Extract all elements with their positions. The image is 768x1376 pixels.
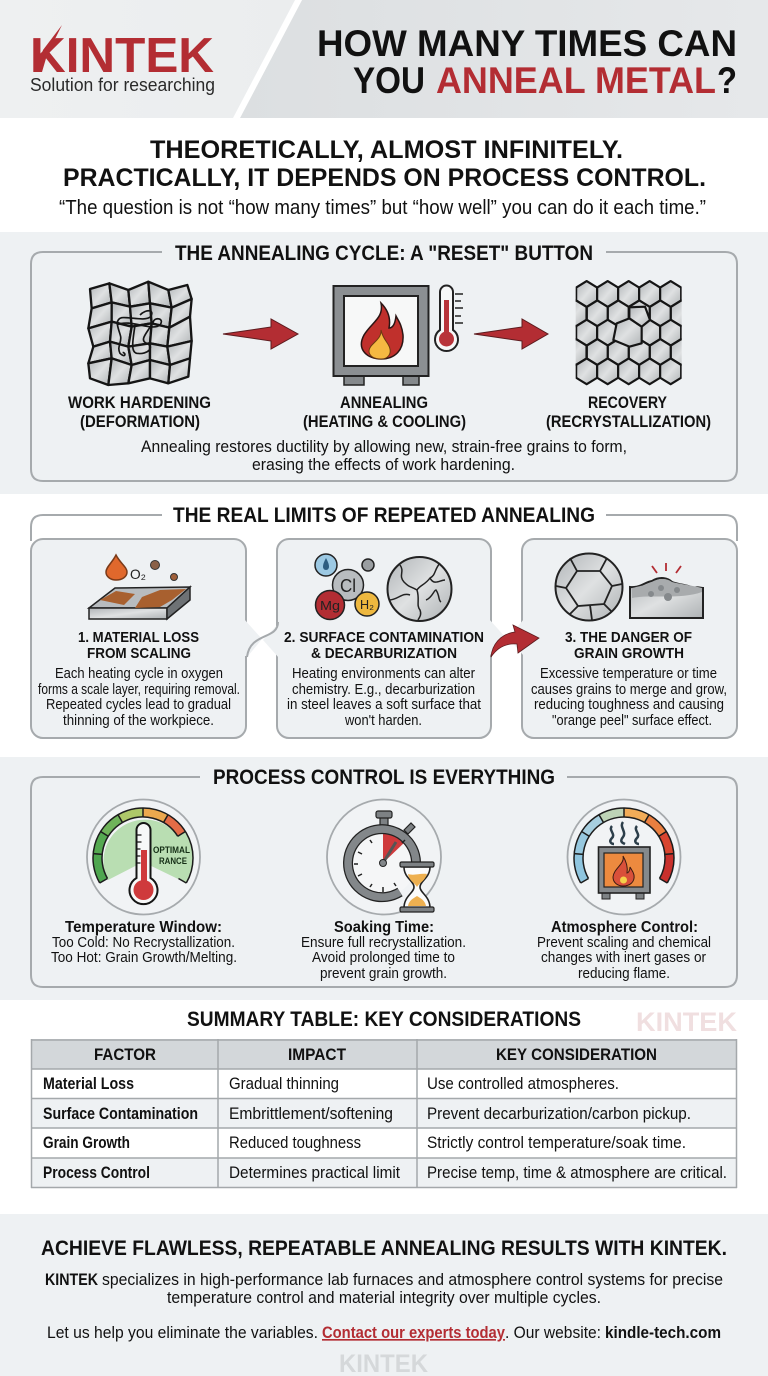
subtitle answer: PRACTICALLY, IT DEPENDS ON PROCESS CONTROL.	[63, 164, 706, 192]
card 2 heading: 2. SURFACE CONTAMINATION	[284, 629, 484, 646]
card 2 body: won't harden.	[344, 713, 422, 729]
card 1: material loss	[38, 555, 240, 729]
heading: summary table: SUMMARY TABLE: KEY CONSIDERATIONS	[187, 1008, 581, 1031]
icon: temperature gauge: OPTIMAL	[153, 845, 190, 856]
icon: stopwatch and hourglass	[327, 800, 441, 914]
panel: annealing cycle	[0, 232, 768, 494]
icon: scaling slab	[89, 555, 190, 619]
card 1 heading: FROM SCALING	[87, 645, 191, 662]
text: annealing explanation	[141, 438, 627, 474]
panel: process control	[0, 757, 768, 1000]
card 3 heading: GRAIN GROWTH	[574, 645, 684, 662]
text: temperature window: Too Cold: No Recrystallization.	[52, 935, 235, 951]
card 2 body	[287, 666, 481, 729]
subtitle answer	[63, 136, 706, 192]
footer contact line: Let us help you eliminate the variables.	[47, 1324, 318, 1342]
footer description: specializes in high-performance lab furnaces and atmosphere control systems for precise	[102, 1271, 723, 1289]
label: annealing: ANNEALING	[340, 394, 428, 412]
text: soaking time: prevent grain growth.	[320, 966, 447, 982]
label: work hardening	[68, 394, 211, 431]
card 2 body: in steel leaves a soft surface that	[287, 697, 481, 713]
text: soaking time: Soaking Time:	[334, 919, 434, 936]
arrow: to recovery	[474, 319, 548, 349]
row: surface contamination: Prevent decarburization/carbon pickup.	[427, 1105, 691, 1123]
title	[317, 23, 737, 101]
footer heading: ACHIEVE FLAWLESS, REPEATABLE ANNEALING RESULTS WITH KINTEK.	[41, 1237, 727, 1260]
row: grain growth	[43, 1134, 686, 1152]
label: work hardening: WORK HARDENING	[68, 394, 211, 412]
heading: real limits: THE REAL LIMITS OF REPEATED ANNEALING	[173, 504, 595, 527]
heading: process control: PROCESS CONTROL IS EVERYTHING	[213, 766, 555, 789]
card 3: grain growth	[531, 554, 727, 729]
row: process control	[43, 1164, 727, 1182]
card 1 heading: 1. MATERIAL LOSS	[78, 629, 199, 646]
icon: temperature gauge	[75, 790, 211, 926]
panel: call to action footer	[0, 1214, 768, 1376]
card 1 body: thinning of the workpiece.	[63, 713, 214, 729]
title: ?	[717, 60, 737, 101]
row: material loss: Use controlled atmospheres.	[427, 1075, 619, 1093]
card 1 body: Repeated cycles lead to gradual	[46, 697, 231, 713]
card 2 heading: & DECARBURIZATION	[311, 645, 457, 662]
footer contact line: Contact our experts today	[322, 1324, 506, 1342]
footer contact line	[47, 1324, 721, 1342]
text: soaking time	[301, 919, 466, 982]
text: atmosphere control: reducing flame.	[578, 966, 670, 982]
cards and connectors	[31, 539, 737, 738]
row: process control: Precise temp, time & atmosphere are critical.	[427, 1164, 727, 1182]
row: grain growth: Strictly control temperature/soak time.	[427, 1134, 686, 1152]
text: temperature window: Too Hot: Grain Growth/Melting.	[51, 950, 237, 966]
icon: enlarged grains and orange peel surface	[556, 554, 703, 620]
summary table	[31, 1039, 737, 1188]
card 3 body	[531, 666, 727, 729]
title: HOW MANY TIMES CAN	[317, 23, 737, 64]
arrow: curved red	[491, 625, 539, 657]
row: surface contamination	[43, 1105, 691, 1123]
label: annealing: (HEATING & COOLING)	[303, 413, 466, 431]
card 3 body: "orange peel" surface effect.	[552, 713, 712, 729]
card 3 heading: 3. THE DANGER OF	[565, 629, 692, 646]
table header: IMPACT	[288, 1046, 346, 1064]
header band	[0, 0, 768, 118]
label: recovery	[546, 394, 711, 431]
card 1 heading	[78, 629, 199, 662]
row: material loss: Material Loss	[43, 1075, 134, 1093]
text: temperature window	[51, 919, 237, 966]
row: process control: Determines practical limit	[229, 1164, 400, 1182]
icon: scaling slab: O₂	[130, 566, 146, 582]
card 3 body: reducing toughness and causing	[534, 697, 724, 713]
card 2 heading	[284, 629, 484, 662]
icon: thermometer	[435, 286, 463, 351]
text: atmosphere control: Atmosphere Control:	[551, 919, 698, 936]
icon: deformed grains	[88, 282, 192, 385]
row: material loss: Gradual thinning	[229, 1075, 339, 1093]
text: atmosphere control: Prevent scaling and chemical	[537, 935, 711, 951]
icon: atmosphere gauge with furnace	[556, 790, 692, 926]
icon: contaminant molecules and cracked surface: Mg	[320, 598, 340, 613]
label: recovery: (RECRYSTALLIZATION)	[546, 413, 711, 431]
table header: KEY CONSIDERATION	[496, 1046, 657, 1064]
text: annealing explanation: Annealing restores ductility by allowing new, strain-free grains to form,	[141, 438, 627, 456]
row: process control: Process Control	[43, 1164, 150, 1182]
row: grain growth: Grain Growth	[43, 1134, 130, 1152]
text: soaking time: Avoid prolonged time to	[312, 950, 455, 966]
title: YOU	[353, 60, 425, 101]
arrow: to annealing	[223, 319, 298, 349]
card 2: surface contamination	[284, 554, 484, 729]
card 3 body: causes grains to merge and grow,	[531, 682, 727, 698]
text: annealing explanation: erasing the effects of work hardening.	[252, 456, 515, 474]
logo: KINTEK	[30, 29, 214, 83]
label: annealing	[303, 394, 466, 431]
row: grain growth: Reduced toughness	[229, 1134, 361, 1152]
row: surface contamination: Surface Contamination	[43, 1105, 198, 1123]
watermark logo: KINTEK	[636, 1007, 738, 1037]
subtitle answer: THEORETICALLY, ALMOST INFINITELY.	[150, 136, 623, 164]
card 2 body: chemistry. E.g., decarburization	[292, 682, 475, 698]
icon: contaminant molecules and cracked surface: H₂	[360, 597, 374, 612]
text: temperature window: Temperature Window:	[65, 919, 222, 936]
text: atmosphere control: changes with inert gases or	[541, 950, 706, 966]
footer contact line: . Our website:	[505, 1324, 601, 1342]
card 2 body: Heating environments can alter	[292, 666, 475, 682]
table header: FACTOR	[94, 1046, 156, 1064]
card 3 heading	[565, 629, 692, 662]
title: ANNEAL METAL	[436, 60, 716, 101]
card 1 body: Each heating cycle in oxygen	[55, 666, 223, 682]
panel: real limits	[31, 504, 737, 738]
logo: Solution for researching	[30, 75, 215, 95]
icon: contaminant molecules and cracked surface	[315, 554, 452, 621]
icon: recrystallized grains	[576, 280, 682, 386]
icon: contaminant molecules and cracked surface: Cl	[340, 576, 356, 596]
card 1 body	[38, 666, 240, 729]
table header	[94, 1046, 657, 1064]
card 1 body: forms a scale layer, requiring removal.	[38, 682, 240, 698]
card 3 body: Excessive temperature or time	[540, 666, 717, 682]
icon: temperature gauge: RANCE	[159, 856, 187, 867]
row: surface contamination: Embrittlement/softening	[229, 1105, 393, 1123]
text: soaking time: Ensure full recrystallization.	[301, 935, 466, 951]
footer description: KINTEK	[45, 1271, 98, 1289]
heading: annealing cycle: THE ANNEALING CYCLE: A "RESET" BUTTON	[175, 242, 593, 265]
quote: “The question is not “how many times” but “how well” you can do it each time.”	[59, 197, 706, 219]
icon: furnace with flame	[334, 286, 428, 385]
text: atmosphere control	[537, 919, 711, 982]
label: recovery: RECOVERY	[588, 394, 667, 412]
label: work hardening: (DEFORMATION)	[80, 413, 200, 431]
footer contact line: kindle-tech.com	[605, 1324, 721, 1342]
footer description	[45, 1271, 723, 1307]
footer description: temperature control and material integrity over multiple cycles.	[167, 1289, 601, 1307]
row: material loss	[43, 1075, 619, 1093]
